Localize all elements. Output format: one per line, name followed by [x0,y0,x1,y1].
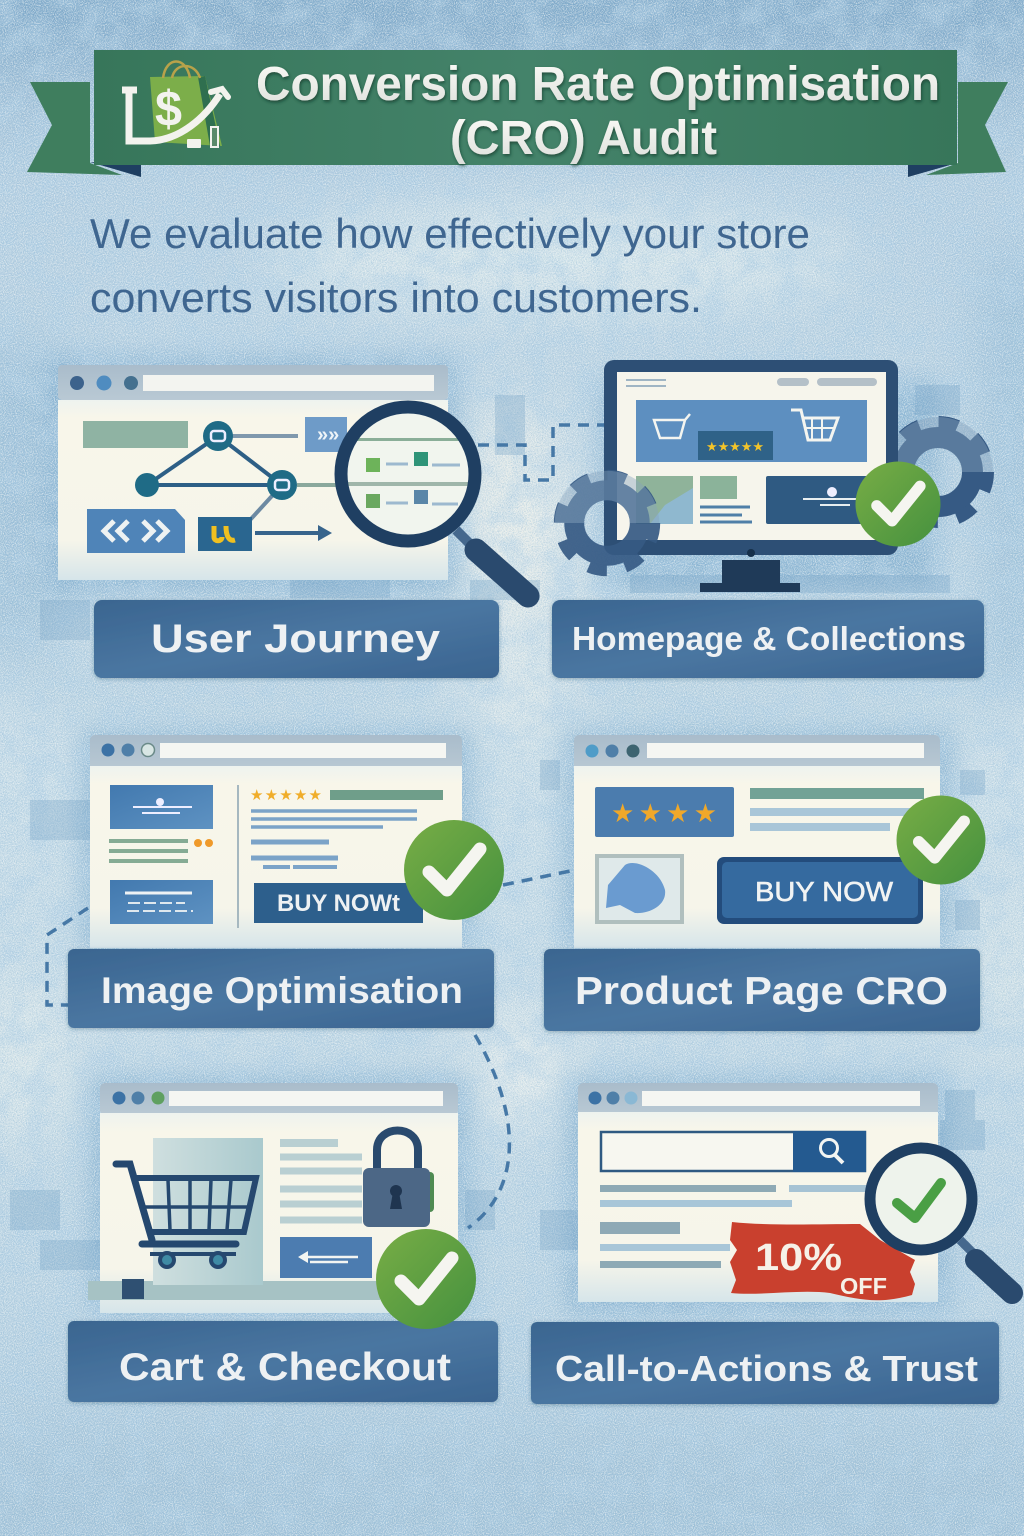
browser window [574,735,940,948]
check badge [856,462,940,546]
title banner [27,50,1008,177]
page content [153,1138,372,1285]
browser window [90,735,462,948]
check badge: cart [376,1229,476,1329]
label: cart and checkout: Cart & Checkout [119,1346,451,1389]
label: product page cro: Product Page CRO [575,970,948,1013]
user flow diagram [83,417,347,553]
right gear [883,417,993,522]
panel: cart and checkout [88,1083,458,1313]
label: cart and checkout [68,1321,498,1402]
panel: image optimisation [90,735,504,948]
label: image optimisation [68,949,494,1028]
monitor: ★★★★★ [706,439,764,454]
label: user journey: User Journey [151,617,441,661]
magnifying glass with check [870,1148,1012,1293]
panel: user journey [58,365,528,596]
title text: (CRO) Audit [450,112,717,165]
browser window [58,365,448,580]
intro text [90,210,810,321]
discount tag: OFF [840,1273,887,1299]
check badge [896,796,986,884]
icon: shopping cart [116,1164,256,1267]
page content [109,785,443,928]
label: product page cro [544,949,980,1031]
ribbon tails [27,82,1008,177]
check badge [404,820,504,920]
label: image optimisation: Image Optimisation [101,970,463,1011]
logo: shopping bag with growth arrow [122,62,228,148]
panel: call to actions and trust [578,1083,1012,1302]
user flow diagram: »» [317,424,339,446]
buy now button [717,857,923,924]
buy now button: BUY NOWt [277,890,400,917]
magnifying glass [341,407,528,596]
page content: ★★★★ [611,798,717,828]
panel: product page cro [574,735,986,948]
label: user journey [94,600,499,678]
label: call to actions and trust: Call-to-Actions & Trust [555,1348,978,1389]
label: call to actions and trust [531,1322,999,1404]
browser window [88,1083,458,1313]
title text: Conversion Rate Optimisation [256,58,940,111]
title text [256,58,940,165]
label: homepage and collections: Homepage & Collections [572,620,966,657]
page content: ★★★★★ [250,787,322,804]
buy now button [254,883,423,923]
logo: shopping bag with growth arrow: $ [155,81,182,137]
panel: homepage and collections [555,360,993,592]
pixel squares decoration [10,385,985,1270]
intro text: We evaluate how effectively your store [90,210,810,257]
dashed connector lines [47,425,604,1228]
label: homepage and collections [552,600,984,678]
buy now button: BUY NOW [755,876,894,907]
discount tag [730,1222,915,1300]
icon: padlock [363,1130,434,1227]
browser window [578,1083,938,1302]
halos behind windows [46,356,954,1314]
left gear [555,471,659,570]
page content [595,787,924,922]
monitor [604,360,898,592]
intro text: converts visitors into customers. [90,274,702,321]
discount tag: 10% [755,1237,842,1279]
search bar [601,1131,866,1172]
page content [600,1185,869,1268]
ribbon body [94,50,957,165]
